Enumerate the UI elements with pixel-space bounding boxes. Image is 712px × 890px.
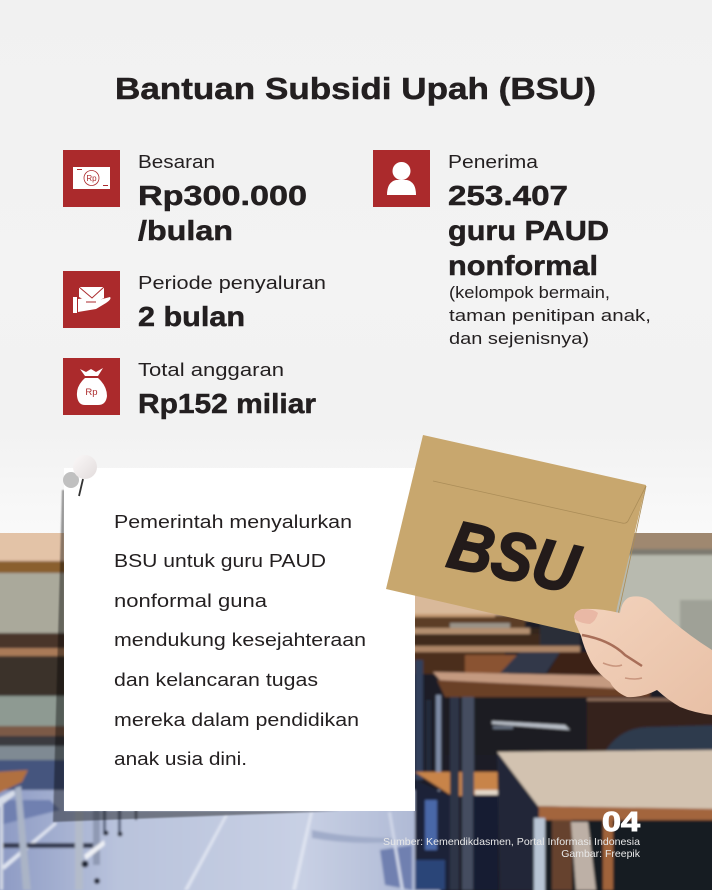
value <box>448 180 609 281</box>
background: classroom photo <box>0 520 712 890</box>
legs and seat <box>415 660 423 780</box>
left chair and legs <box>0 770 28 795</box>
paragraph: BSU untuk guru PAUD <box>114 551 326 571</box>
icon: person <box>373 150 430 207</box>
paragraph: dan kelancaran tugas <box>114 670 318 690</box>
icon: banknote: Rp <box>86 174 97 183</box>
panel: penerima <box>373 150 651 348</box>
paragraph: mereka dalam pendidikan <box>114 710 359 730</box>
value: nonformal <box>448 250 598 281</box>
icon: money bag <box>63 358 120 415</box>
label: Total anggaran <box>138 360 284 380</box>
title: Bantuan Subsidi Upah (BSU) <box>115 71 596 106</box>
value: 253.407 <box>448 180 568 211</box>
paragraph: anak usia dini. <box>114 749 247 769</box>
value: guru PAUD <box>448 215 609 246</box>
paragraph: Pemerintah menyalurkan <box>114 512 352 532</box>
BSU handwriting: BSU <box>442 506 587 608</box>
label: Besaran <box>138 152 215 172</box>
right wall <box>630 533 712 550</box>
white note card with pin <box>53 455 415 822</box>
value: 2 bulan <box>138 301 245 332</box>
background: crumpled paper <box>0 0 712 540</box>
icon: hand with envelope <box>63 271 120 328</box>
value: Rp300.000 <box>138 180 307 211</box>
hand holding envelope <box>574 596 712 715</box>
panel: periode penyaluran <box>63 271 326 332</box>
note: dan sejenisnya) <box>449 330 589 348</box>
paragraph <box>114 512 366 769</box>
note: taman penitipan anak, <box>449 307 651 325</box>
note: (kelompok bermain, <box>449 284 610 302</box>
source credits <box>383 836 641 860</box>
source credits: Sumber: Kemendikdasmen, Portal Informasi Indonesia <box>383 836 640 848</box>
value <box>138 180 307 246</box>
label: Periode penyaluran <box>138 273 326 293</box>
icon: push pin <box>63 455 97 496</box>
value: Rp152 miliar <box>138 388 316 419</box>
floor <box>0 790 440 890</box>
far desks <box>415 596 530 622</box>
panel: besaran <box>63 150 307 246</box>
paragraph: mendukung kesejahteraan <box>114 630 366 650</box>
envelope with BSU <box>386 435 646 640</box>
paragraph: nonformal guna <box>114 591 268 611</box>
source credits: Gambar: Freepik <box>561 848 641 860</box>
label: Penerima <box>448 152 539 172</box>
left wall strip <box>0 533 64 564</box>
icon: money bag: Rp <box>85 387 98 398</box>
icon: banknote <box>63 150 120 207</box>
big front desk <box>497 750 712 810</box>
brown box and chair back <box>586 702 712 750</box>
value: /bulan <box>138 215 233 246</box>
panel: total anggaran <box>63 358 316 419</box>
note <box>449 284 651 348</box>
front desk <box>433 672 650 690</box>
page number: 04 <box>602 806 641 837</box>
